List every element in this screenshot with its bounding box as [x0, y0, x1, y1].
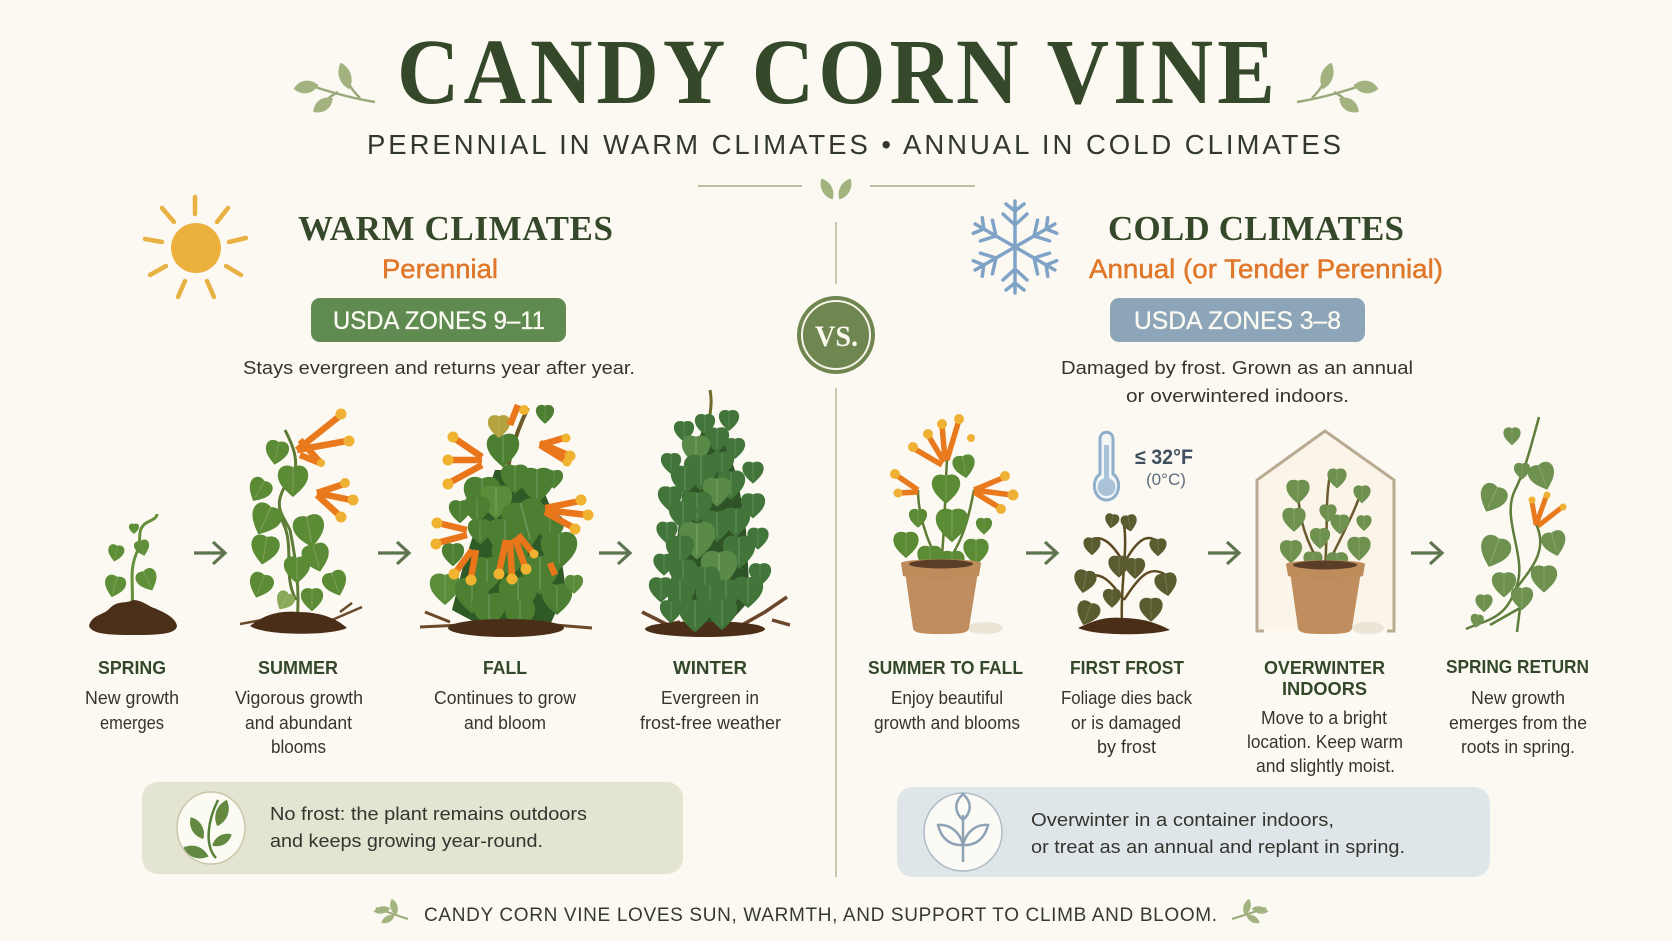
caption: first frost [1061, 658, 1193, 757]
caption: overwinter indoors: INDOORS [1282, 679, 1367, 699]
footer [373, 898, 1269, 926]
caption: winter: frost-free weather [640, 713, 781, 733]
caption: fall: FALL [483, 658, 527, 678]
caption: first frost: Foliage dies back [1061, 688, 1193, 708]
pot [901, 559, 981, 634]
caption: summer: Vigorous growth [235, 688, 363, 708]
caption: spring return: emerges from the [1449, 713, 1587, 733]
caption: summer [235, 658, 363, 757]
illustration: fall vine in bloom [420, 405, 594, 637]
subheading: perennial: Perennial [382, 254, 498, 284]
caption: spring: SPRING [98, 658, 166, 678]
caption: summer to fall [868, 658, 1023, 733]
label: frost temperature: ≤ 32°F [1135, 446, 1193, 469]
caption: overwinter indoors: and slightly moist. [1256, 756, 1395, 776]
icon: left title sprig [293, 61, 375, 117]
caption: summer: and abundant [245, 713, 352, 733]
title: CANDY CORN VINE [397, 21, 1275, 124]
center divider with VS badge: VS. [815, 320, 858, 353]
heading: cold climates: COLD CLIMATES [1108, 209, 1404, 248]
arrow [1208, 542, 1239, 564]
description: cold: Damaged by frost. Grown as an annual [1061, 358, 1413, 378]
illustration: spring seedling [89, 514, 177, 635]
arrow [599, 542, 630, 564]
arrow [1026, 542, 1057, 564]
callout text [270, 804, 587, 851]
caption: winter: WINTER [673, 658, 747, 678]
icon: thermometer [1094, 432, 1119, 500]
center divider with VS badge [797, 222, 875, 877]
caption: summer to fall: growth and blooms [874, 713, 1020, 733]
icon: right title sprig [1297, 61, 1379, 117]
label: frost temperature: (0°C) [1146, 470, 1186, 489]
callout text: and keeps growing year-round. [270, 831, 543, 851]
caption: spring return: SPRING RETURN [1446, 657, 1589, 677]
header [293, 21, 1379, 202]
heading: warm climates: WARM CLIMATES [298, 209, 613, 248]
illustration: summer vine [240, 408, 362, 634]
icon: sun [145, 197, 246, 297]
subtitle: PERENNIAL IN WARM CLIMATES • ANNUAL IN COLD CLIMATES [367, 129, 1341, 160]
caption: winter [640, 658, 781, 733]
caption: summer: SUMMER [258, 658, 338, 678]
callout text: or treat as an annual and replant in spring. [1031, 837, 1405, 857]
caption: fall [434, 658, 577, 733]
caption: summer to fall: SUMMER TO FALL [868, 658, 1023, 678]
description: cold [1061, 358, 1413, 406]
callout: no frost [142, 782, 683, 874]
panel: warm climates [85, 197, 790, 874]
illustration: winter evergreen vine [642, 390, 790, 637]
caption: overwinter indoors: location. Keep warm [1247, 732, 1403, 752]
caption: first frost: or is damaged [1071, 713, 1181, 733]
icon: footer right sprig [1232, 898, 1269, 926]
icon: footer left sprig [373, 898, 408, 926]
icon: header divider with leaves [698, 176, 975, 202]
illustration: frost damaged plant [1072, 513, 1179, 634]
caption: spring return [1446, 657, 1589, 757]
illustration: potted plant in bloom [890, 414, 1018, 634]
caption: fall: Continues to grow [434, 688, 577, 708]
caption: winter: Evergreen in [661, 688, 759, 708]
caption: overwinter indoors: Move to a bright [1261, 708, 1387, 728]
callout text: Overwinter in a container indoors, [1031, 810, 1334, 830]
caption: spring: New growth [85, 688, 179, 708]
illustration: greenhouse with potted plant [1257, 431, 1394, 634]
illustration: spring return vine [1466, 417, 1569, 632]
subheading: annual: Annual (or Tender Perennial) [1089, 254, 1443, 284]
arrow [378, 542, 409, 564]
description: warm: Stays evergreen and returns year after year. [243, 358, 635, 378]
callout: overwinter [897, 787, 1490, 877]
caption: fall: and bloom [464, 713, 546, 733]
panel: cold climates [868, 201, 1589, 877]
caption: spring return: roots in spring. [1461, 737, 1575, 757]
caption: summer to fall: Enjoy beautiful [891, 688, 1003, 708]
badge: USDA zones 3-8: USDA ZONES 3–8 [1134, 307, 1341, 335]
caption: spring [85, 658, 179, 733]
caption: spring return: New growth [1471, 688, 1565, 708]
caption: spring: emerges [100, 713, 164, 733]
caption: summer: blooms [271, 737, 326, 757]
caption: overwinter indoors: OVERWINTER [1264, 658, 1385, 678]
pot [1286, 560, 1365, 634]
badge: USDA zones 3-8 [1110, 298, 1365, 342]
icon: snowflake [969, 201, 1061, 293]
footer text: CANDY CORN VINE LOVES SUN, WARMTH, AND SUPPORT TO CLIMB AND BLOOM. [424, 905, 1217, 926]
callout text: No frost: the plant remains outdoors [270, 804, 587, 824]
callout text [1031, 810, 1405, 857]
description: cold: or overwintered indoors. [1126, 386, 1349, 406]
badge: USDA zones 9-11 [311, 298, 566, 342]
icon: plant outline in circle [924, 793, 1002, 871]
label: frost temperature [1135, 446, 1193, 489]
caption: first frost: by frost [1097, 737, 1156, 757]
arrow [194, 542, 225, 564]
badge: USDA zones 9-11: USDA ZONES 9–11 [333, 307, 545, 335]
arrow [1411, 542, 1442, 564]
caption: overwinter indoors [1247, 658, 1403, 776]
icon: leaf sprig in circle [177, 792, 245, 864]
caption: first frost: FIRST FROST [1070, 658, 1184, 678]
